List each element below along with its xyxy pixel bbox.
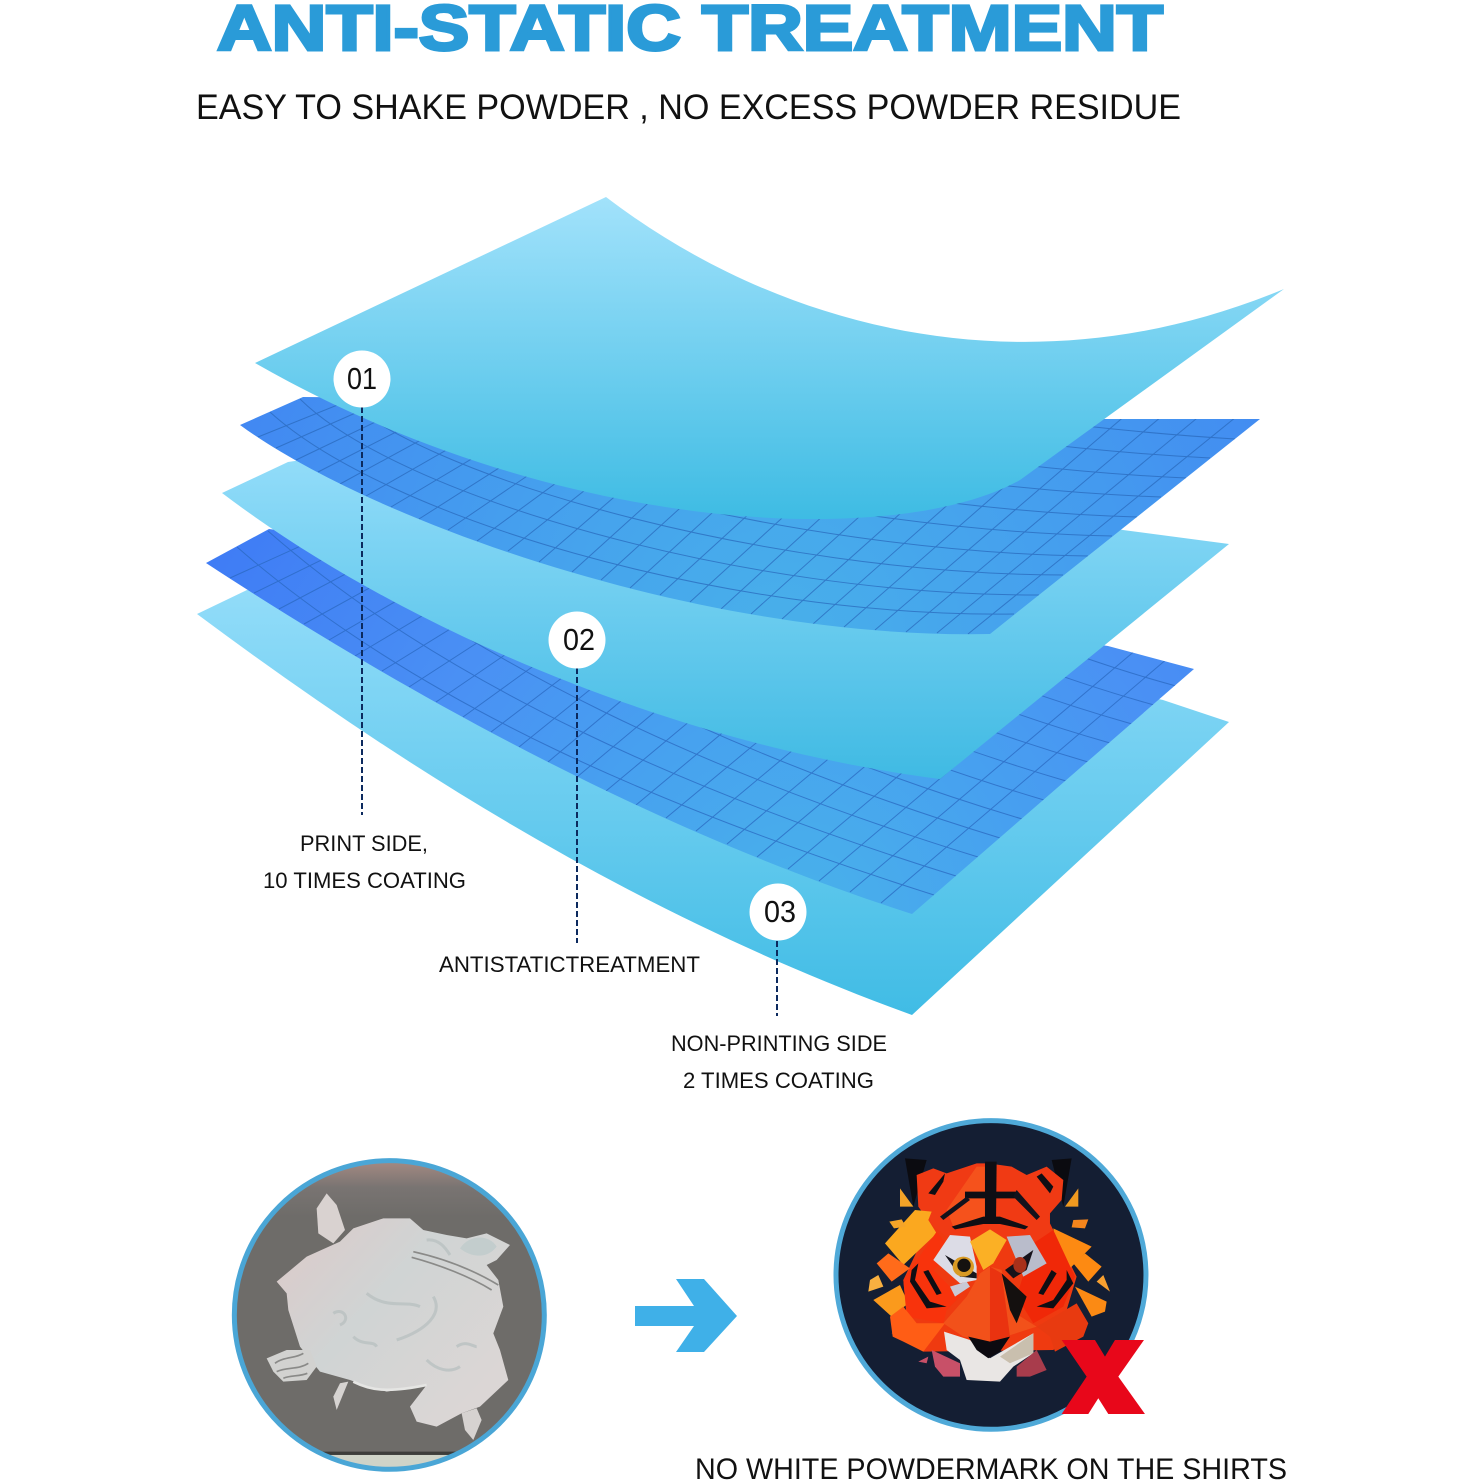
callout 01: 01 [347, 361, 377, 396]
layer: middle film [222, 400, 1229, 779]
callout 02: 02 [563, 622, 595, 657]
icon: red X [1062, 1340, 1145, 1414]
label: non-printing side [671, 1031, 887, 1093]
layer: lower antistatic grid [206, 529, 1194, 914]
photo: tiger print in circle [836, 1121, 1146, 1429]
callout 03 [750, 884, 806, 1016]
label: print side: 10 TIMES COATING [263, 868, 466, 893]
tiger head [868, 1158, 1110, 1382]
layer: bottom non-printing coating [197, 590, 1229, 1015]
layer: top print side film [255, 197, 1284, 519]
arrow [635, 1279, 737, 1352]
callout 01 [334, 350, 390, 815]
label: print side [263, 831, 466, 893]
label: print side: PRINT SIDE, [300, 831, 428, 856]
label: non-printing side: NON-PRINTING SIDE [671, 1031, 887, 1056]
callout 02 [548, 612, 606, 943]
label: non-printing side: 2 TIMES COATING [683, 1068, 874, 1093]
layered film diagram [197, 197, 1284, 1015]
subtitle: EASY TO SHAKE POWDER , NO EXCESS POWDER RESIDUE [196, 88, 1181, 127]
photo: white powder mark on dark shirt [220, 1161, 560, 1475]
callout 03: 03 [764, 894, 796, 929]
layer: upper antistatic grid [240, 397, 1260, 634]
label: antistatic treatment: ANTISTATICTREATMENT [439, 952, 700, 977]
